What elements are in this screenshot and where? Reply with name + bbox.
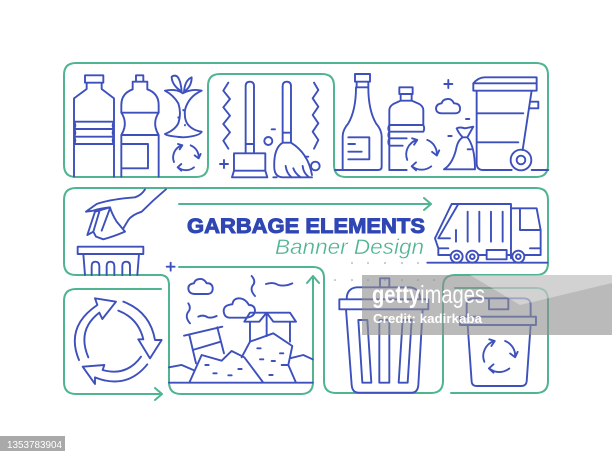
dots pattern bbox=[334, 262, 435, 281]
icon: plunger bbox=[232, 82, 267, 177]
icon: tilted bin bbox=[184, 327, 224, 363]
icon: apple core bbox=[165, 76, 202, 137]
watermark: getty images overlay: Credit: kadirkaba bbox=[373, 312, 483, 326]
group: garbage truck bbox=[427, 204, 547, 263]
icon: hand with tissue bbox=[86, 189, 166, 239]
icon: detergent bottle bbox=[121, 75, 159, 177]
group: bins bbox=[339, 278, 536, 393]
icon: small recycle bbox=[173, 144, 201, 171]
title: GARBAGE ELEMENTS bbox=[187, 214, 425, 238]
icon: zigzag right bbox=[313, 83, 318, 149]
panel: recycle frame with right arrow bbox=[64, 289, 162, 400]
icon: small bin bbox=[78, 247, 143, 275]
icon: smell waves and birds bbox=[187, 276, 292, 323]
icon: truck bbox=[427, 204, 547, 263]
group: bottles and apple core bbox=[74, 75, 202, 177]
arrow: top of title bbox=[179, 198, 431, 210]
icon: recycling bin bbox=[460, 298, 536, 386]
group: recycle and landfill bbox=[75, 276, 313, 384]
icon: water bottle bbox=[388, 87, 424, 170]
panel: landfill frame with up arrow bbox=[160, 275, 319, 394]
icon: glass bottle bbox=[335, 74, 382, 170]
icon: cloud and plus bbox=[436, 80, 460, 113]
icon: large recycle arrows bbox=[75, 298, 162, 384]
icon: trash can bbox=[339, 278, 428, 393]
icon: recycle over bottle bbox=[406, 138, 439, 170]
icon: plastic bottle bbox=[74, 75, 114, 177]
group: cleaning tools bbox=[220, 82, 312, 177]
icon: open boxes bbox=[244, 313, 296, 342]
group: hand and small bin bbox=[78, 189, 175, 275]
group: bottles, bag and wheelie bin bbox=[311, 74, 548, 170]
icon: plus and minus decorations bbox=[220, 129, 308, 177]
icon: clouds bbox=[188, 279, 255, 318]
icon: zigzag left bbox=[223, 83, 230, 149]
panel: recycling bin frame bbox=[451, 288, 548, 393]
panel: middle band frame bbox=[64, 188, 548, 393]
icon: landfill mounds bbox=[169, 333, 313, 383]
image id tag: 1353783904 bbox=[7, 439, 62, 451]
panel: top band frame bbox=[64, 63, 548, 177]
icon: rubbish dashes bbox=[205, 348, 283, 375]
subtitle: Banner Design bbox=[275, 236, 424, 259]
icon: wheelie bin bbox=[473, 77, 538, 170]
watermark: getty images overlay bbox=[362, 275, 612, 335]
icon: garbage bag bbox=[444, 119, 475, 169]
icon: broom bbox=[274, 82, 312, 177]
watermark: getty images overlay: gettyimages bbox=[372, 281, 485, 309]
icon: plus bbox=[167, 263, 175, 271]
icon: recycle on bin bbox=[483, 339, 518, 373]
